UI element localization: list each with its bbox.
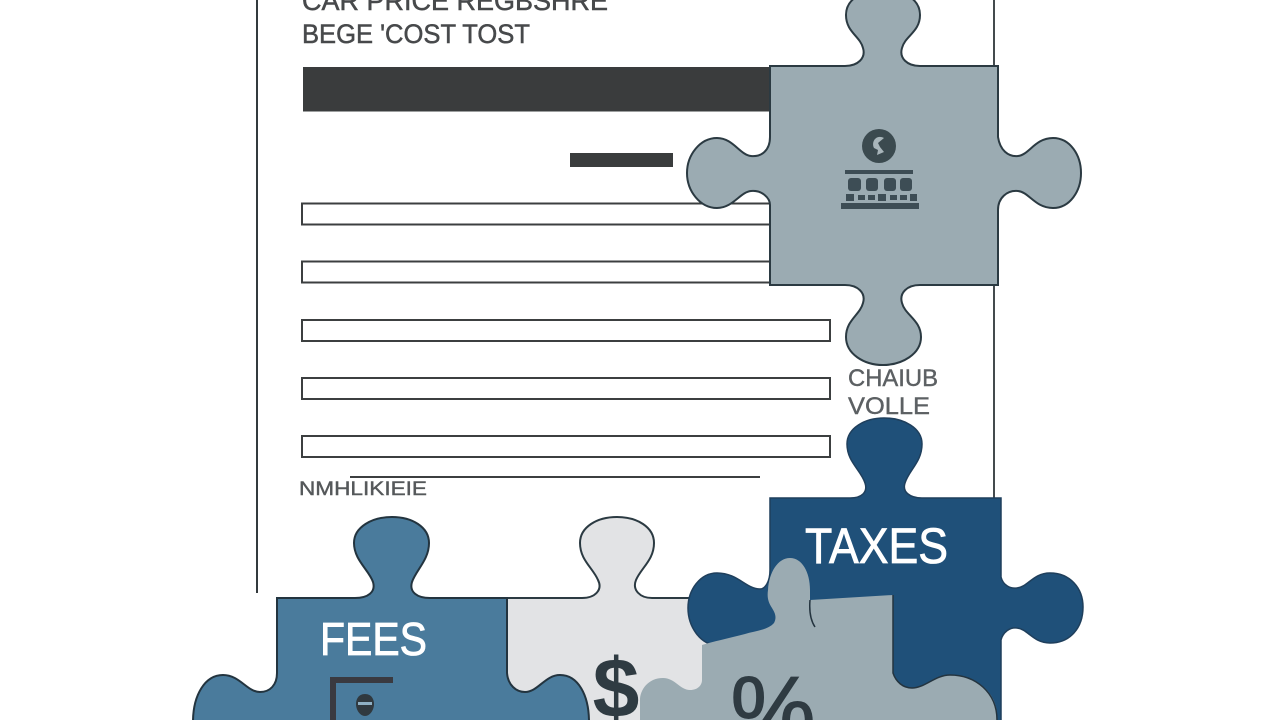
signature line [350,476,760,478]
side caption: VOLLE [848,393,930,420]
label: fees: FEES [320,613,427,665]
puzzle piece: grey top [687,0,1081,365]
puzzle piece: fees [193,517,589,720]
side caption: CHAIUB [848,365,938,392]
document right edge [993,0,995,500]
icon: seal and building [841,129,919,209]
icon: fee document [333,680,393,720]
panel: price document [256,0,995,593]
side caption [848,365,938,420]
puzzle piece: percent [640,558,997,720]
puzzle piece: light dollar [507,517,740,720]
dark header bar [303,67,773,112]
piece shape [507,517,740,720]
piece shape [640,558,997,720]
puzzle piece: taxes [688,418,1083,720]
document left edge [256,0,258,593]
form rows [302,204,830,457]
label: taxes: TAXES [805,518,948,574]
piece outline accents [810,595,997,720]
document heading: BEGE 'COST TOST [302,19,530,49]
piece shape [687,0,1081,365]
signature caption: NMHLIKIEIE [299,479,427,500]
piece shape [193,517,589,720]
document heading [302,0,608,49]
small dark bar [570,153,673,167]
piece shape [688,418,1083,720]
